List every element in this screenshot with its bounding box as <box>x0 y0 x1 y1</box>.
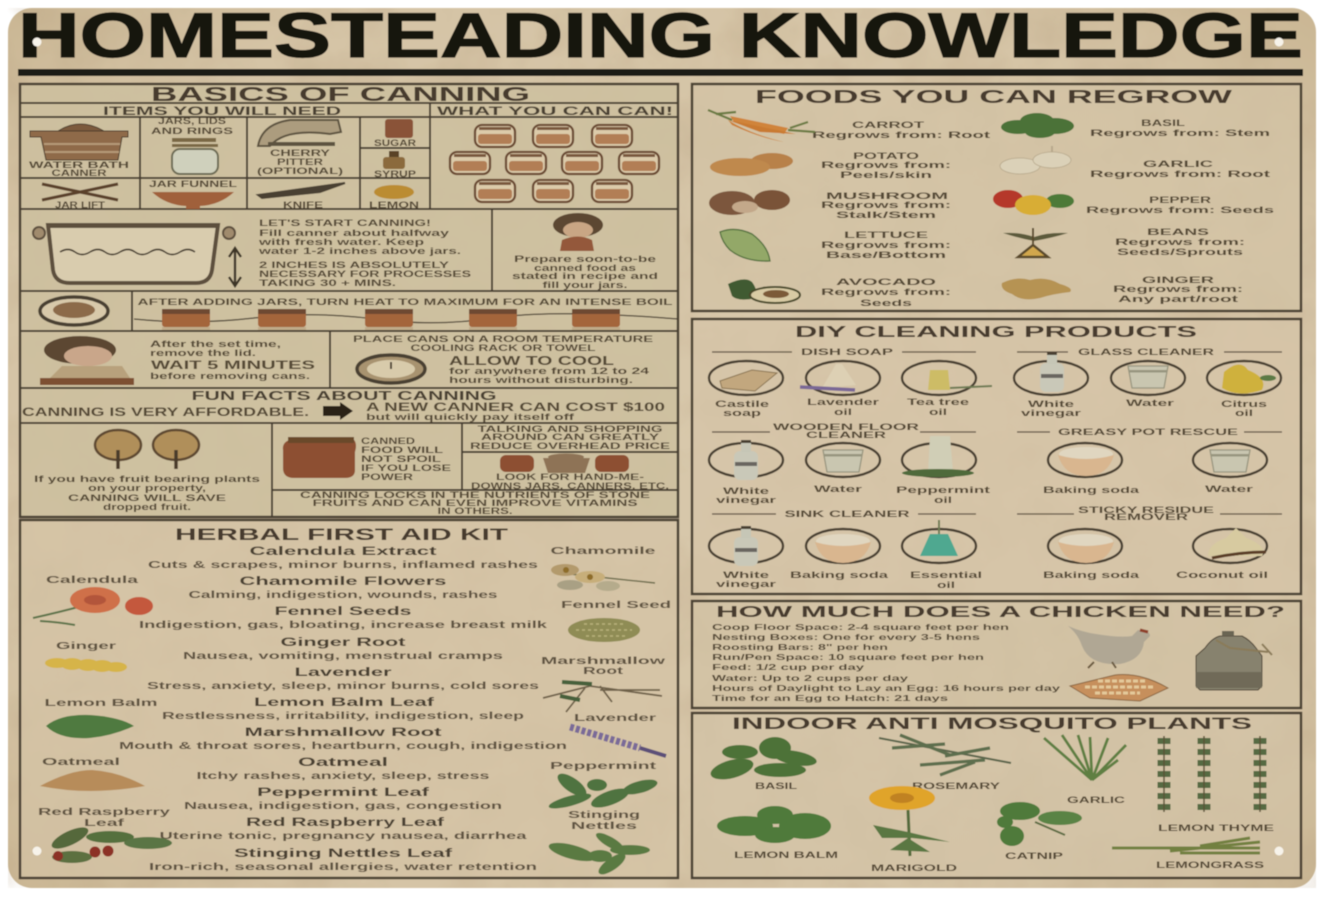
herb labels left <box>38 575 171 829</box>
text: allow to cool: hours without disturbing. <box>449 375 633 386</box>
plant: lemongrass: LEMONGRASS <box>1156 860 1264 871</box>
food labels left: Regrows from: Root <box>812 130 992 141</box>
chicken requirements list: Hours of Daylight to Lay an Egg: 16 hours per day <box>712 683 1060 693</box>
heading: indoor anti mosquito plants: INDOOR ANTI MOSQUITO PLANTS <box>732 715 1252 733</box>
item: cherry pitter <box>257 120 343 177</box>
food labels left: Regrows from: <box>821 287 951 298</box>
herb labels right: Root <box>583 666 624 677</box>
what you can can header: WHAT YOU CAN CAN! <box>437 106 673 118</box>
text: canning is very affordable: CANNING IS VERY AFFORDABLE. <box>22 405 309 419</box>
icon: clock <box>357 355 425 383</box>
chicken requirements list: Run/Pen Space: 10 square feet per hen <box>712 652 984 662</box>
food labels left <box>812 120 992 309</box>
remedy list: Iron-rich, seasonal allergies, water retention <box>149 862 537 873</box>
item: jar funnel <box>149 179 237 209</box>
herb labels left: Calendula <box>46 575 139 586</box>
herb labels right: Nettles <box>571 821 638 832</box>
text: a new canner can cost <box>366 400 666 423</box>
remedy list: Stinging Nettles Leaf <box>234 848 452 860</box>
text: let's start canning: TAKING 30 + MINS. <box>259 278 396 289</box>
illustration: woman preparing food: canned food as <box>534 263 636 274</box>
icon: hen <box>1068 626 1150 668</box>
ingredient labels: Baking soda <box>1043 570 1140 581</box>
icon: peppermint <box>547 770 659 812</box>
text: let's start canning: NECESSARY FOR PROCESSES <box>259 269 471 280</box>
recipe titles: STICKY RESIDUE <box>1078 505 1214 516</box>
food labels right: GINGER <box>1142 275 1214 286</box>
food labels right <box>1086 118 1274 305</box>
illustration: woman preparing food <box>512 213 658 291</box>
text: let's start canning <box>257 218 471 289</box>
panel: foods you can regrow <box>692 84 1301 311</box>
item: cherry pitter: CHERRY <box>270 148 331 159</box>
text: talking and shopping: REDUCE OVERHEAD PRICE <box>470 441 670 452</box>
remedy list: Cuts & scrapes, minor burns, inflamed rashes <box>148 560 539 571</box>
text: fruit bearing plants: dropped fruit. <box>103 502 191 513</box>
text: allow to cool: ALLOW TO COOL <box>449 354 615 368</box>
food labels left: CARROT <box>852 120 924 131</box>
ingredient labels: Castile <box>715 399 769 410</box>
recipe titles: SINK CLEANER <box>784 509 910 520</box>
ingredient labels: Essential <box>910 570 982 581</box>
icons: jars and canner <box>500 454 629 473</box>
remedy list: Nausea, indigestion, gas, congestion <box>184 801 502 812</box>
recipe titles: DISH SOAP <box>801 347 894 358</box>
heading: chicken need: HOW MUCH DOES A CHICKEN NEED? <box>716 604 1285 621</box>
remedy list: Ginger Root <box>280 637 406 649</box>
item: jar lift: JAR LIFT <box>55 200 105 211</box>
ingredient rings <box>709 361 1281 563</box>
icon: marshmallow root <box>543 682 662 712</box>
food labels right: BEANS <box>1147 227 1209 238</box>
text: place cans on cooling rack: PLACE CANS ON A ROOM TEMPERATURE <box>353 334 653 345</box>
herb labels right: Lavender <box>574 713 656 724</box>
herb labels right: Marshmallow <box>541 656 665 667</box>
chicken requirements list <box>712 622 1060 703</box>
ingredient labels: oil <box>929 407 947 418</box>
ingredient labels: soap <box>723 408 761 419</box>
food labels left: AVOCADO <box>836 277 936 288</box>
ingredient labels: Baking soda <box>1043 485 1140 496</box>
ingredient labels: oil <box>1235 408 1253 419</box>
icon: ginger root <box>1002 279 1071 299</box>
chicken requirements list: Coop Floor Space: 2-4 square feet per hen <box>712 622 1009 632</box>
item: water bath canner: CANNER <box>52 168 107 179</box>
herb labels right: Chamomile <box>550 546 656 557</box>
text: look for hand-me-downs <box>471 472 669 492</box>
text: a new canner can cost: A NEW CANNER CAN COST $100 <box>366 400 666 414</box>
text: talking and shopping: TALKING AND SHOPPING <box>478 424 662 435</box>
ingredient illustrations <box>720 352 1276 566</box>
item: cherry pitter: PITTER <box>277 157 323 168</box>
text: canned food will not spoil: CANNED <box>361 436 415 447</box>
herb labels left: Lemon Balm <box>44 698 158 709</box>
text: fruit bearing plants <box>34 474 260 513</box>
plant: rosemary <box>879 735 1011 792</box>
food labels right: Regrows from: Stem <box>1090 128 1270 139</box>
illustration: woman preparing food: stated in recipe and <box>512 271 658 282</box>
jars you can can <box>450 125 659 202</box>
ingredient labels: oil <box>834 407 852 418</box>
herb labels left: Leaf <box>84 818 125 829</box>
ingredient labels: oil <box>934 495 952 506</box>
ingredient labels <box>715 397 1268 591</box>
recipe titles: REMOVER <box>1104 512 1188 523</box>
text: canned food will not spoil <box>361 436 451 483</box>
text: let's start canning: water 1-2 inches above jars. <box>257 246 461 257</box>
text: wait 5 minutes: After the set time, <box>150 339 281 350</box>
item: sugar: SUGAR <box>374 138 416 149</box>
food labels left: Regrows from: <box>821 160 951 171</box>
title: HOMESTEADING KNOWLEDGE <box>18 1 1303 71</box>
remedy list: Marshmallow Root <box>244 727 442 739</box>
plant: catnip: CATNIP <box>1005 851 1064 862</box>
ingredient labels: Coconut oil <box>1176 570 1268 581</box>
item: syrup: SYRUP <box>374 169 417 180</box>
remedy list: Red Raspberry Leaf <box>246 817 444 829</box>
icon: oatmeal <box>40 770 145 791</box>
chicken requirements list: Feed: 1/2 cup per day <box>712 662 864 672</box>
panel: how much does a chicken need <box>692 601 1301 708</box>
icon: chamomile <box>551 564 655 591</box>
item: sugar <box>374 119 416 149</box>
ingredient labels: White <box>723 486 769 497</box>
herb labels right: Peppermint <box>550 761 657 772</box>
remedy list: Itchy rashes, anxiety, sleep, stress <box>196 771 490 782</box>
remedy list: Oatmeal <box>298 757 388 769</box>
icon: two fruit trees <box>95 430 199 469</box>
chicken requirements list: Water: Up to 2 cups per day <box>712 673 908 683</box>
illustration: woman preparing food: Prepare soon-to-be <box>514 254 656 265</box>
remedy list: Mouth & throat sores, heartburn, cough, indigestion <box>119 741 567 752</box>
plant: rosemary: ROSEMARY <box>912 781 1001 792</box>
food labels right: GARLIC <box>1143 159 1213 170</box>
plant: lemon thyme: LEMON THYME <box>1158 823 1274 834</box>
plant: lemon balm: LEMON BALM <box>734 850 838 861</box>
plant: garlic chives <box>1044 735 1126 806</box>
icon: plate <box>40 297 108 325</box>
food labels left: POTATO <box>853 151 919 162</box>
ingredient labels: Peppermint <box>896 485 991 496</box>
food labels left: Base/Bottom <box>826 250 946 261</box>
text: canning locks in nutrients: CANNING LOCKS IN THE NUTRIENTS OF STONE <box>300 490 650 501</box>
text: canned food will not spoil: NOT SPOIL <box>361 454 441 465</box>
text: canning locks in nutrients: IN OTHERS. <box>438 506 512 517</box>
heading: diy cleaning products: DIY CLEANING PRODUCTS <box>795 324 1198 341</box>
food labels left: MUSHROOM <box>826 191 948 202</box>
food labels left: LETTUCE <box>844 230 928 241</box>
food labels right: Regrows from: <box>1113 284 1243 295</box>
plant: basil <box>708 737 818 792</box>
icon: eggs tray <box>1070 675 1168 701</box>
icon: basil <box>1001 113 1074 138</box>
plant: lemon thyme <box>1158 736 1274 834</box>
text: let's start canning: 2 INCHES IS ABSOLUTELY <box>259 260 450 271</box>
ingredient labels: oil <box>937 580 955 591</box>
food labels left: Stalk/Stem <box>836 210 936 221</box>
item: jars, lids and rings: AND RINGS <box>151 126 233 137</box>
heading: foods you can regrow: FOODS YOU CAN REGROW <box>755 87 1232 107</box>
text: allow to cool: for anywhere from 12 to 24 <box>449 366 650 377</box>
herb labels right: Stinging <box>568 810 640 821</box>
item: jars, lids and rings: JARS, LIDS <box>158 116 226 127</box>
text: let's start canning: with fresh water. Keep <box>257 237 424 248</box>
plant: garlic chives: GARLIC <box>1067 795 1125 806</box>
remedy list: Calming, indigestion, wounds, rashes <box>188 590 498 601</box>
remedy list: Restlessness, irritability, indigestion, sleep <box>162 711 524 722</box>
text: wait 5 minutes: WAIT 5 MINUTES <box>151 358 315 372</box>
icon: stinging nettles <box>547 830 650 878</box>
icon: lavender <box>570 727 666 756</box>
item: cherry pitter: (OPTIONAL) <box>257 166 343 177</box>
ingredient labels: vinegar <box>716 579 777 590</box>
text: canning locks in nutrients: FRUITS AND CAN EVEN IMPROVE VITAMINS <box>312 498 638 509</box>
remedy list: Uterine tonic, pregnancy nausea, diarrhea <box>160 831 527 842</box>
text: after adding jars: AFTER ADDING JARS, TURN HEAT TO MAXIMUM FOR AN INTENSE BOIL <box>138 297 673 308</box>
icon: bean sprout <box>1003 228 1068 257</box>
icon: carrots <box>708 110 815 142</box>
icon: lettuce <box>720 229 770 261</box>
item: jar funnel: JAR FUNNEL <box>149 179 237 190</box>
remedy list: Stress, anxiety, sleep, minor burns, cold sores <box>147 681 540 692</box>
item: knife: KNIFE <box>283 200 323 211</box>
recipe titles <box>773 347 1238 523</box>
text: place cans on cooling rack <box>353 334 653 354</box>
herb labels right: Fennel Seed <box>561 600 671 611</box>
panel: diy cleaning products <box>692 319 1301 594</box>
food labels right: Regrows from: Seeds <box>1086 205 1274 216</box>
item: water bath canner: WATER BATH <box>29 160 129 171</box>
items you will need header: ITEMS YOU WILL NEED <box>103 106 341 118</box>
item: water bath canner <box>29 124 129 179</box>
illustration: woman removing lid <box>40 336 134 385</box>
item: knife <box>258 183 345 211</box>
text: let's start canning: LET'S START CANNING! <box>259 218 431 229</box>
text: fruit bearing plants: CANNING WILL SAVE <box>68 493 226 504</box>
ingredient labels: White <box>723 570 769 581</box>
recipe titles: CLEANER <box>806 430 886 441</box>
icon: garlic <box>1000 146 1071 174</box>
text: fruit bearing plants: If you have fruit bearing plants <box>34 474 260 485</box>
food labels left: Peels/skin <box>840 170 932 181</box>
ingredient labels: Water <box>814 484 863 495</box>
text: a new canner can cost: but will quickly pay itself off <box>366 412 575 423</box>
text: wait 5 minutes: before removing cans. <box>150 371 310 382</box>
remedy list <box>119 546 567 873</box>
text: place cans on cooling rack: COOLING RACK OR TOWEL <box>410 343 596 354</box>
ingredient labels: White <box>1028 399 1074 410</box>
plant: lemon balm <box>717 806 838 861</box>
chicken requirements list: Roosting Bars: 8" per hen <box>712 642 888 652</box>
herb labels left: Oatmeal <box>42 757 120 768</box>
remedy list: Calendula Extract <box>250 546 437 558</box>
illustration: canner with water level <box>33 224 241 286</box>
icon: milk can <box>1196 631 1272 690</box>
item: jar lift <box>42 184 118 211</box>
remedy list: Indigestion, gas, bloating, increase breast milk <box>139 620 548 631</box>
plant: marigold <box>869 786 957 874</box>
text: wait 5 minutes: remove the lid. <box>150 348 256 359</box>
food labels right: BASIL <box>1141 118 1185 129</box>
text: look for hand-me-downs: LOOK FOR HAND-ME- <box>496 472 644 483</box>
text: canning locks in nutrients <box>300 490 650 517</box>
remedy list: Chamomile Flowers <box>240 576 446 588</box>
icon: calendula <box>33 587 153 625</box>
ingredient labels: Water <box>1205 484 1254 495</box>
remedy list: Lemon Balm Leaf <box>254 697 434 709</box>
item: jars, lids and rings <box>151 116 233 174</box>
chicken requirements list: Nesting Boxes: One for every 3-5 hens <box>712 632 980 642</box>
recipe titles: WOODEN FLOOR <box>773 422 919 433</box>
panel: herbal first aid kit <box>20 520 678 878</box>
icon: mushrooms <box>709 190 790 215</box>
remedy list: Fennel Seeds <box>274 606 412 618</box>
food labels right: Regrows from: <box>1115 237 1245 248</box>
heading: basics of canning: BASICS OF CANNING <box>151 84 530 106</box>
plant: catnip <box>997 802 1082 862</box>
text: wait 5 minutes <box>150 339 315 382</box>
plant: basil: BASIL <box>755 781 797 792</box>
panel: indoor anti mosquito plants <box>692 713 1301 878</box>
icon: large jar <box>283 437 356 478</box>
ingredient labels: Citrus <box>1221 399 1267 410</box>
illustration: jars boiling in water <box>134 309 678 330</box>
recipe titles: GLASS CLEANER <box>1078 347 1214 358</box>
item: lemon: LEMON <box>369 200 419 211</box>
herb labels right <box>541 546 671 832</box>
herb labels left: Red Raspberry <box>38 807 171 818</box>
ingredient labels: Lavender <box>807 397 879 408</box>
arrow <box>323 402 353 420</box>
icon: potatoes <box>710 153 793 176</box>
food labels right: PEPPER <box>1149 195 1211 206</box>
ingredient labels: Baking soda <box>790 570 889 581</box>
section rules <box>712 352 1282 514</box>
chicken requirements list: Time for an Egg to Hatch: 21 days <box>712 693 948 703</box>
ingredient labels: Tea tree <box>907 397 969 408</box>
text: canned food will not spoil: IF YOU LOSE <box>361 463 451 474</box>
item: syrup <box>374 151 417 180</box>
food labels right: Regrows from: Root <box>1090 169 1272 180</box>
plant: lemongrass <box>1112 838 1264 871</box>
icon: ginger slices <box>45 658 127 672</box>
text: canned food will not spoil: POWER <box>361 472 413 483</box>
text: talking and shopping: AROUND CAN GREATLY <box>481 432 660 443</box>
recipe titles: GREASY POT RESCUE <box>1058 427 1238 438</box>
illustration: woman preparing food: fill your jars. <box>542 280 628 291</box>
icon: peppers <box>993 190 1074 215</box>
title <box>18 1 1303 76</box>
icon: lemon balm <box>46 715 134 738</box>
remedy list: Lavender <box>294 667 392 679</box>
icon: avocado <box>728 279 800 303</box>
item: lemon <box>369 185 419 211</box>
remedy list: Nausea, vomiting, menstrual cramps <box>183 651 504 662</box>
ingredient labels: Water <box>1126 398 1175 409</box>
food labels left: Seeds <box>860 298 912 309</box>
food labels left: Regrows from: <box>821 200 951 211</box>
herb labels left: Ginger <box>56 641 116 652</box>
plant: marigold: MARIGOLD <box>871 863 957 874</box>
text: look for hand-me-downs: DOWNS JARS, CANNERS, ETC. <box>471 481 669 492</box>
text: fruit bearing plants: on your property, <box>88 483 206 494</box>
food labels right: Any part/root <box>1118 294 1240 305</box>
ingredient labels: vinegar <box>716 495 777 506</box>
subheading: fun facts about canning: FUN FACTS ABOUT CANNING <box>192 388 496 403</box>
text: talking and shopping <box>470 424 670 452</box>
heading: herbal first aid kit: HERBAL FIRST AID KIT <box>175 526 508 544</box>
food labels left: Regrows from: <box>821 240 951 251</box>
ingredient labels: vinegar <box>1021 408 1082 419</box>
remedy list: Peppermint Leaf <box>257 787 429 799</box>
icon: red raspberry leaf <box>49 823 172 863</box>
icon: fennel seed <box>568 618 640 642</box>
text: let's start canning: Fill canner about halfway <box>259 228 450 239</box>
panel: basics of canning <box>20 84 678 517</box>
text: canned food will not spoil: FOOD WILL <box>361 445 443 456</box>
food labels right: Seeds/Sprouts <box>1117 247 1243 258</box>
text: allow to cool <box>449 354 650 386</box>
